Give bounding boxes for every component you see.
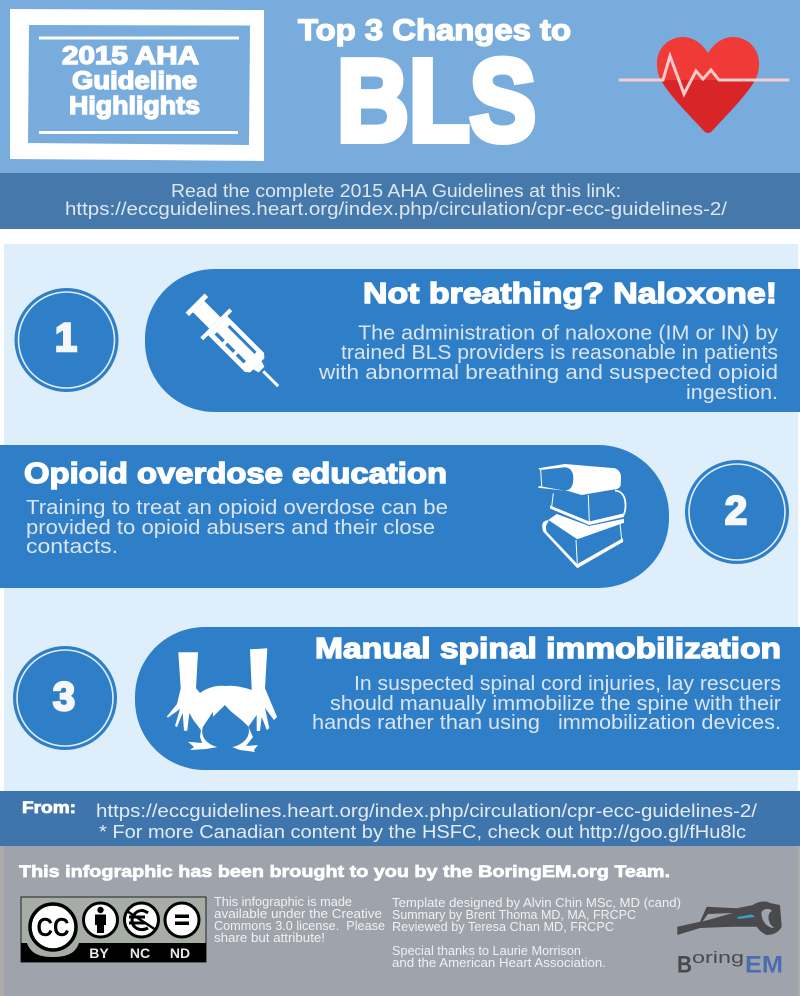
panel: manual spinal immobilization: In suspected spinal cord injuries, lay rescuers xyxy=(354,672,781,695)
panel: opioid overdose education xyxy=(0,445,669,588)
license text: share but attribute! xyxy=(214,931,325,945)
BoringEM logo xyxy=(677,901,783,978)
guidelines link band xyxy=(0,173,800,229)
guideline highlights badge: 2015 AHA xyxy=(62,42,199,70)
license text: This infographic is made xyxy=(214,895,352,909)
icon: syringe xyxy=(181,289,293,401)
number badge 2 xyxy=(685,460,789,564)
team credits text xyxy=(392,896,681,970)
team credits text: Template designed by Alvin Chin MSc, MD (cand) xyxy=(392,896,681,910)
title: BLS xyxy=(337,36,536,166)
panel: manual spinal immobilization xyxy=(135,627,800,770)
team credits text: Special thanks to Laurie Morrison xyxy=(392,944,581,958)
guideline highlights badge xyxy=(10,9,264,161)
panel: naloxone: trained BLS providers is reasonable in patients xyxy=(341,341,778,364)
main content panel xyxy=(4,244,798,791)
number badge 3: 3 xyxy=(53,675,75,719)
credits heading: This infographic has been brought to you by the BoringEM.org Team. xyxy=(19,862,670,881)
panel: naloxone: with abnormal breathing and suspected opioid xyxy=(318,361,778,384)
guideline highlights badge: Guideline xyxy=(72,67,197,95)
guidelines link band: Read the complete 2015 AHA Guidelines at this link: xyxy=(171,180,621,201)
icon: creative commons badge: CC xyxy=(36,912,70,942)
credits panel xyxy=(0,846,800,996)
BoringEM logo: EM xyxy=(745,952,783,978)
panel: opioid overdose education: Opioid overdose education xyxy=(24,458,447,490)
header panel xyxy=(0,0,800,173)
panel: naloxone: ingestion. xyxy=(686,381,778,404)
panel: naloxone: The administration of naloxone (IM or IN) by xyxy=(358,322,779,344)
panel: manual spinal immobilization: Manual spinal immobilization xyxy=(315,633,781,665)
icon: creative commons badge: NC xyxy=(130,945,150,961)
panel: opioid overdose education: contacts. xyxy=(26,535,118,558)
team credits text: Summary by Brent Thoma MD, MA, FRCPC xyxy=(392,908,636,922)
number badge 3 xyxy=(13,646,117,750)
license text: Commons 3.0 license. Please xyxy=(214,919,385,933)
source band: * For more Canadian content by the HSFC, check out http://goo.gl/fHu8lc xyxy=(99,821,746,842)
guidelines link band: https://eccguidelines.heart.org/index.php/circulation/cpr-ecc-guidelines-2/ xyxy=(65,198,728,219)
number badge 2: 2 xyxy=(725,489,747,533)
guideline highlights badge: Highlights xyxy=(69,92,200,120)
source band: https://eccguidelines.heart.org/index.php/circulation/cpr-ecc-guidelines-2/ xyxy=(96,800,758,821)
number badge 1: 1 xyxy=(55,316,77,360)
license text: available under the Creative xyxy=(214,907,382,921)
panel: opioid overdose education: provided to opioid abusers and their close xyxy=(26,516,435,539)
icon: creative commons badge: BY xyxy=(89,945,109,961)
team credits text: Reviewed by Teresa Chan MD, FRCPC xyxy=(392,920,614,934)
source band xyxy=(0,791,800,846)
source band: From: xyxy=(22,799,76,817)
panel: naloxone xyxy=(145,269,800,412)
number badge 1 xyxy=(14,288,118,392)
panel: naloxone: Not breathing? Naloxone! xyxy=(363,278,777,310)
icon: creative commons badge: ND xyxy=(170,945,190,961)
BoringEM logo: B xyxy=(677,952,692,978)
icon: stack of books xyxy=(538,464,626,568)
panel: manual spinal immobilization: hands rather than using immobilization devices. xyxy=(312,711,781,734)
title: Top 3 Changes to xyxy=(298,14,571,47)
BoringEM logo: oring xyxy=(692,948,744,967)
panel: manual spinal immobilization: should manually immobilize the spine with their xyxy=(330,692,781,715)
team credits text: and the American Heart Association. xyxy=(392,956,606,970)
license text xyxy=(214,895,385,945)
icon: creative commons badge xyxy=(21,897,206,962)
panel: opioid overdose education: Training to treat an opioid overdose can be xyxy=(26,496,448,519)
icon: heart with pulse line xyxy=(620,37,788,133)
icon: hands holding head xyxy=(167,648,277,752)
